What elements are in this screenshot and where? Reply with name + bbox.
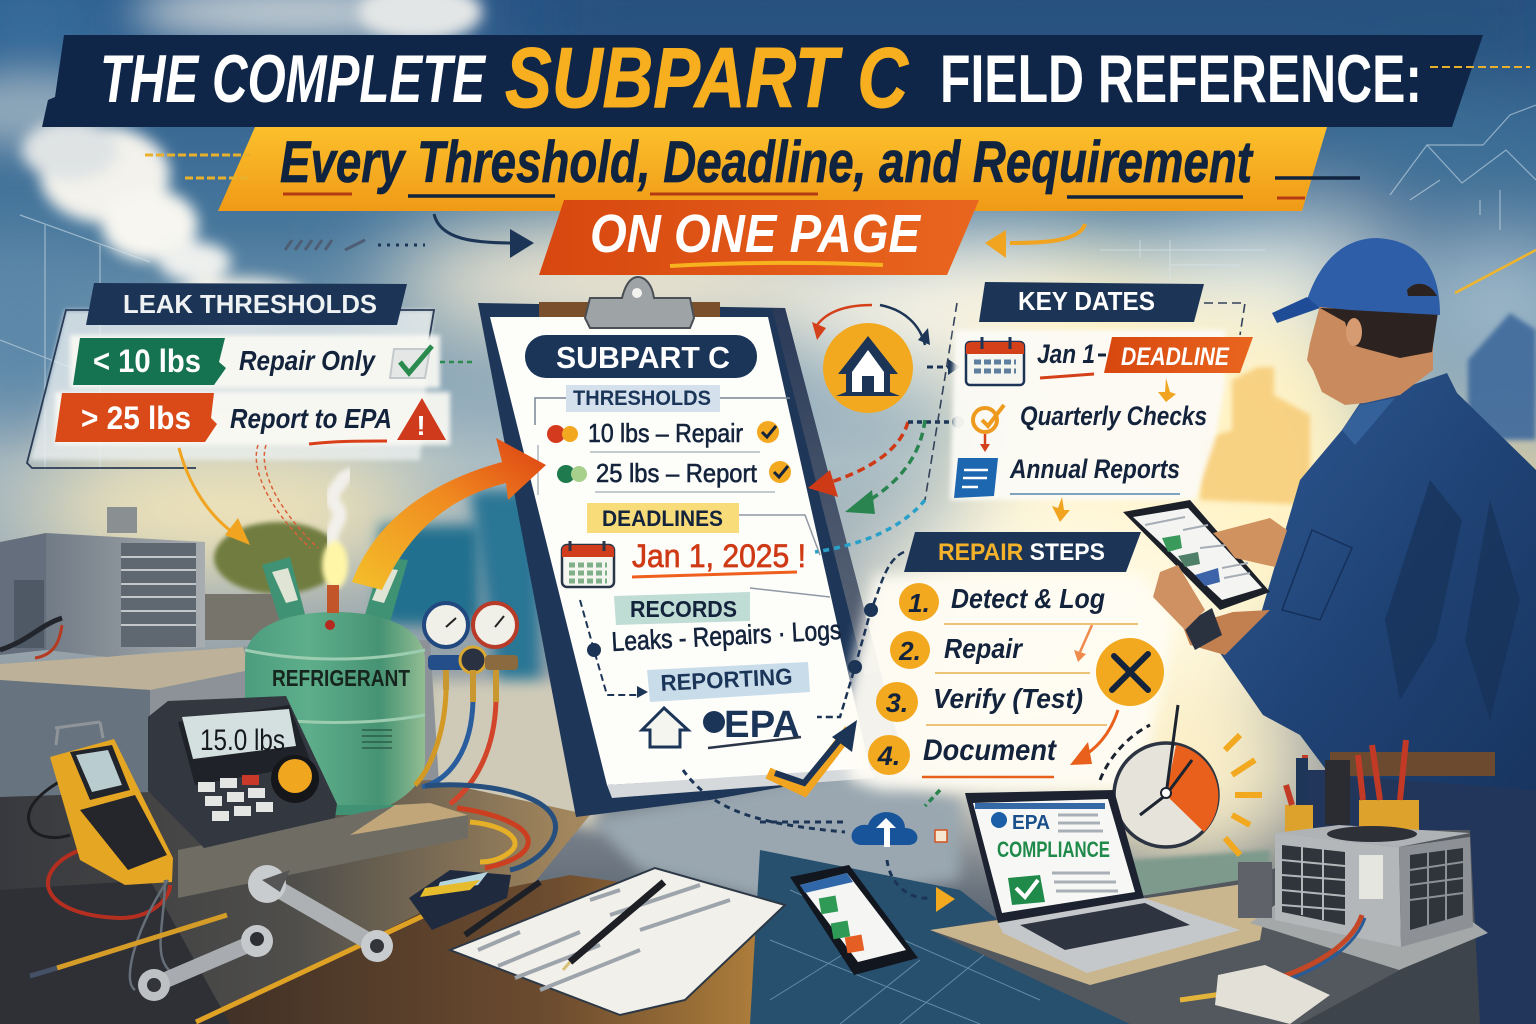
step 2 (890, 631, 1024, 669)
step 1 (899, 583, 1105, 621)
accent: top right yellow line (1455, 250, 1536, 293)
panel background (950, 330, 1225, 500)
section: deadlines: Jan 1, 2025 ! (632, 538, 806, 574)
step 2: 2. (898, 636, 921, 666)
icon: warning triangle: ! (416, 410, 426, 441)
subpart C heading (525, 335, 757, 378)
hands (1213, 518, 1287, 567)
section: reporting (642, 662, 810, 748)
section: records: Leaks - Repairs · Logs (611, 615, 842, 657)
EPA logo text: EPA (724, 704, 800, 746)
panel background (30, 310, 433, 460)
step 2: Repair (944, 633, 1024, 664)
heading (904, 532, 1141, 572)
row backgrounds (55, 335, 450, 445)
background trees and buildings (214, 313, 1536, 700)
text: repair only: Repair Only (239, 345, 376, 376)
icon: clock check (973, 405, 1004, 452)
icon: calendar (966, 337, 1024, 385)
tablet (1123, 500, 1270, 610)
clipboard board (478, 303, 905, 817)
step 3 (876, 682, 1083, 722)
heading (86, 283, 407, 325)
EPA label: EPA (1012, 812, 1050, 834)
clipboard paper (490, 317, 870, 785)
heading: KEY DATES (1018, 286, 1155, 316)
arrow: checkmark trend (768, 720, 857, 790)
clipboard clip (539, 277, 720, 328)
row: 25 lbs: 25 lbs – Report (596, 458, 758, 488)
text: Jan 1: Jan 1 (1037, 339, 1095, 369)
title text line one: SUBPART C (505, 31, 909, 126)
subtitle banner: Every Threshold, Deadline, and Requirement (280, 130, 1254, 195)
shirt (1220, 373, 1536, 790)
on one page banner: ON ONE PAGE (590, 204, 922, 264)
step 4 (868, 734, 1058, 775)
arrow: repair to verify (1074, 625, 1092, 662)
title text line one (100, 31, 1422, 126)
compliance label: COMPLIANCE (997, 837, 1110, 862)
section: thresholds: THRESHOLDS (573, 387, 711, 410)
hair (1320, 308, 1438, 358)
ear (1346, 318, 1362, 346)
shirt shadows (1385, 480, 1520, 720)
check box (1008, 875, 1045, 905)
icon: calendar (562, 541, 614, 587)
icon: document (954, 458, 998, 498)
ground surfaces (0, 594, 1536, 1024)
papers (1215, 965, 1330, 1024)
icon: house badge (812, 305, 960, 413)
step 3: Verify (Test) (933, 683, 1083, 714)
forearm (1183, 610, 1270, 655)
arrows: key dates to clipboard (808, 416, 964, 552)
illustration: small leak detector (409, 870, 540, 935)
icon: down arrow small (1052, 497, 1070, 522)
icon: warning triangle (397, 398, 446, 441)
panel: leak thresholds (27, 283, 450, 468)
step 1: 1. (908, 588, 930, 618)
big orange arrow to clipboard (352, 438, 546, 590)
wrench one (248, 865, 393, 962)
heading (979, 282, 1204, 322)
title bar (42, 35, 1483, 127)
panel frame (925, 303, 1245, 500)
arrow: repair down (1070, 710, 1118, 765)
illustration: concrete slab (178, 803, 468, 898)
tool belt (1285, 740, 1495, 835)
panel frame (27, 310, 434, 468)
blue building (1468, 313, 1536, 440)
icon: tools badge (1096, 638, 1164, 706)
section: records: RECORDS (630, 596, 737, 622)
illustration: technician (1123, 238, 1536, 1024)
step 3: 3. (886, 688, 908, 718)
decorative blueprint lines (0, 105, 1536, 470)
tank label: REFRIGERANT (272, 665, 410, 691)
illustration: wrenches and pencil (30, 865, 425, 1022)
illustration: refrigerant tank (245, 470, 425, 815)
connector line (817, 552, 904, 717)
illustration: rooftop AC unit (0, 507, 205, 658)
icon: cloud upload (683, 770, 955, 912)
text: quarterly checks: Quarterly Checks (1020, 401, 1207, 431)
watch (1183, 608, 1222, 650)
section: deadlines (562, 503, 830, 597)
section: deadlines: DEADLINES (602, 506, 723, 531)
teal wall behind laptop (1130, 850, 1270, 905)
illustration: smartphone (790, 865, 918, 975)
arrow: thresholds to tank (179, 362, 475, 548)
icon: down arrow (1158, 378, 1176, 402)
tag: under 10 lbs: < 10 lbs (93, 343, 201, 379)
scale readout: 15.0 lbs (200, 724, 285, 757)
subpart C heading: SUBPART C (556, 340, 730, 375)
section: records (580, 592, 842, 698)
illustration: yellow multimeter (28, 722, 175, 990)
concrete floor (930, 780, 1536, 1024)
tag: deadline: DEADLINE (1121, 343, 1230, 371)
panel: repair steps (817, 532, 1164, 777)
subtitle banner (145, 127, 1360, 211)
grey blue floor under clipboard (590, 770, 960, 905)
neck and face (1307, 305, 1433, 405)
illustration: stopwatch gauge (1100, 705, 1262, 855)
row: 10 lbs: 10 lbs – Repair (588, 418, 743, 448)
on one page banner (539, 200, 979, 275)
gold building (1200, 367, 1310, 505)
text: report to EPA: Report to EPA (230, 403, 392, 434)
section: thresholds (535, 385, 791, 495)
tag: under 10 lbs (73, 338, 226, 385)
illustration: field report and pen (450, 868, 785, 1015)
blueprint floor (750, 850, 1130, 1024)
arrow: left of banner (285, 214, 534, 258)
icon: building (642, 708, 688, 747)
illustration: digital scale (148, 696, 337, 848)
tag: deadline (1104, 337, 1253, 373)
wrench two (138, 925, 273, 1001)
illustration: laptop with EPA compliance (965, 790, 1240, 973)
tag: over 25 lbs (55, 393, 217, 442)
heading: LEAK THRESHOLDS (123, 289, 377, 319)
step 4: 4. (877, 741, 900, 771)
heading: REPAIR STEPS (938, 539, 1105, 566)
panel: key dates (925, 282, 1253, 522)
icon: check box (390, 346, 432, 378)
title banner (42, 31, 1530, 127)
illustration: rooftop condenser unit (1180, 825, 1488, 1024)
tape roll (1238, 862, 1272, 918)
section: reporting: REPORTING (660, 663, 793, 696)
trousers (1300, 770, 1536, 1024)
EPA label (991, 812, 1050, 834)
step 4: Document (923, 734, 1058, 767)
step 1: Detect & Log (951, 583, 1105, 614)
arrow: right of banner (985, 224, 1085, 258)
illustration: manifold gauges and hoses (415, 603, 556, 870)
leak plume (331, 470, 346, 550)
tag: over 25 lbs: > 25 lbs (81, 400, 191, 436)
cap (1272, 238, 1440, 323)
panel: central clipboard (478, 277, 905, 817)
text: annual reports: Annual Reports (1009, 454, 1180, 484)
title text line one: THE COMPLETE (100, 41, 487, 117)
panel: repair steps background (840, 575, 1175, 790)
